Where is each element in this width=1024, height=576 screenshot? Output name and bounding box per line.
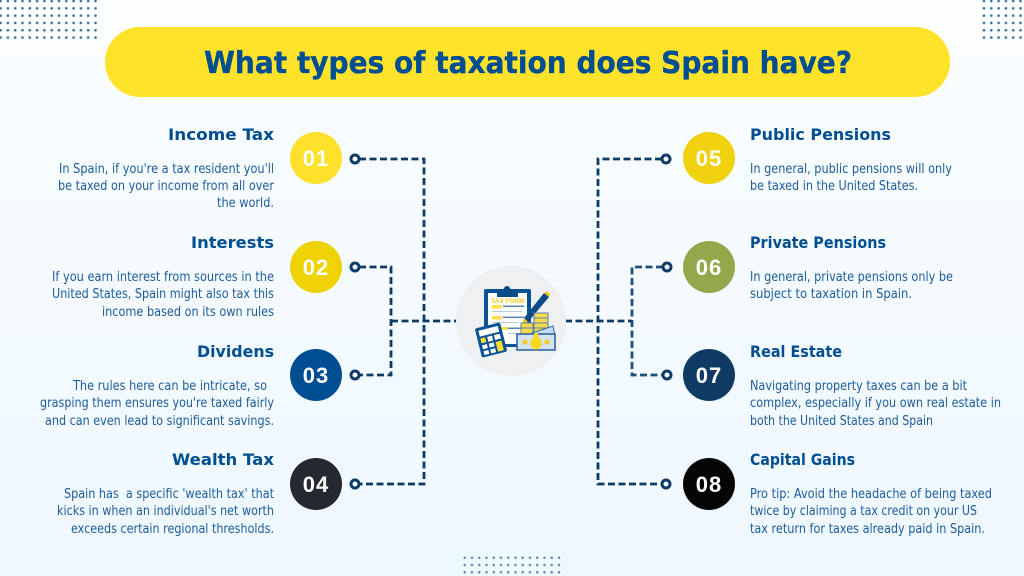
text block: Public Pensions: In general, public pensions will only [750, 162, 952, 177]
text block: Dividens: The rules here can be intricate, so [72, 379, 267, 394]
badge 04 [290, 458, 342, 510]
badge 03 [290, 349, 342, 401]
text block: Private Pensions: subject to taxation in Spain. [750, 287, 912, 302]
text block: Dividens: Dividens [197, 342, 274, 361]
form lines: TAX FORM [491, 298, 525, 305]
badge 07 [683, 349, 735, 401]
text block: Income Tax: Income Tax [168, 125, 275, 144]
connector: left to centre [391, 320, 457, 322]
text block: Public Pensions: Public Pensions [750, 125, 891, 144]
connector end rings [351, 155, 671, 488]
badge 02 [290, 241, 342, 293]
text block: Dividens: grasping them ensures you're taxed fairly [40, 396, 274, 411]
title banner [105, 27, 950, 97]
badge 08: 08 [696, 472, 722, 497]
text block: Wealth Tax: Wealth Tax [172, 450, 275, 469]
dot pattern bottom [461, 554, 563, 576]
text block: Private Pensions [750, 233, 953, 302]
coin stacks [521, 313, 548, 334]
badge 03: 03 [303, 363, 329, 388]
connector: right group outer [598, 159, 662, 484]
clipboard [484, 289, 531, 347]
text block: Wealth Tax: exceeds certain regional thresholds. [71, 522, 274, 537]
badge 06: 06 [696, 255, 722, 280]
dot pattern top right [980, 0, 1024, 41]
text block: Private Pensions: Private Pensions [750, 233, 886, 252]
central tax form icon [456, 266, 566, 376]
badge 01: 01 [303, 146, 329, 171]
text block: Public Pensions: be taxed in the United States. [750, 179, 918, 194]
badge 06 [683, 241, 735, 293]
text block: Income Tax: the world. [217, 196, 274, 211]
badge 07: 07 [696, 363, 722, 388]
text block: Real Estate: Navigating property taxes can be a bit [750, 379, 967, 394]
text block: Interests: United States, Spain might also tax this [52, 287, 274, 302]
badge 05: 05 [696, 146, 722, 171]
dot pattern top left [0, 0, 99, 41]
calculator [475, 322, 507, 358]
text block: Real Estate: Real Estate [750, 342, 842, 361]
banknotes and money bag [532, 326, 555, 340]
text block: Income Tax: be taxed on your income from all over [58, 179, 275, 194]
text block: Income Tax: In Spain, if you're a tax resident you'll [59, 162, 274, 177]
text block: Capital Gains [750, 450, 992, 537]
text block: Capital Gains: twice by claiming a tax credit on your US [750, 504, 977, 519]
text block: Public Pensions [750, 125, 952, 194]
text block: Capital Gains: Pro tip: Avoid the headache of being taxed [750, 487, 992, 502]
text block: Real Estate [750, 342, 1001, 429]
text block: Interests [52, 233, 274, 320]
text block: Capital Gains: Capital Gains [750, 450, 855, 469]
title: What types of taxation does Spain have? [204, 46, 852, 81]
text block: Wealth Tax: kicks in when an individual's net worth [57, 504, 274, 519]
text block: Interests: Interests [191, 233, 274, 252]
badge 08 [683, 458, 735, 510]
text block: Private Pensions: In general, private pensions only be [750, 270, 953, 285]
text block: Real Estate: both the United States and Spain [750, 414, 933, 429]
badge 01 [290, 132, 342, 184]
text block: Dividens [40, 342, 274, 429]
connector: left group outer [359, 159, 424, 484]
text block: Interests: If you earn interest from sources in the [52, 270, 274, 285]
connector: right to centre [565, 320, 632, 322]
text block: Wealth Tax [57, 450, 275, 537]
text block: Capital Gains: tax return for taxes already paid in Spain. [750, 522, 985, 537]
text block: Dividens: and can even lead to significant savings. [45, 414, 274, 429]
text block: Interests: income based on its own rules [102, 305, 274, 320]
pen [524, 293, 549, 322]
connector: left group inner [359, 267, 391, 375]
text block: Income Tax [58, 125, 275, 211]
badge 04: 04 [303, 472, 329, 497]
badge 05 [683, 132, 735, 184]
connector: right group inner [632, 267, 663, 375]
badge 02: 02 [303, 255, 329, 280]
text block: Wealth Tax: Spain has a specific 'wealth tax' that [64, 487, 274, 502]
